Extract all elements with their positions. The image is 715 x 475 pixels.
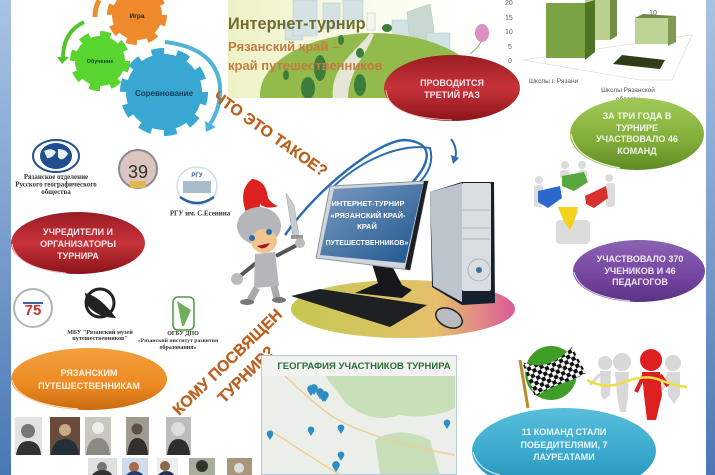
portraits of travellers <box>15 417 252 475</box>
logo: Russian Geographical Society: общества <box>41 189 71 196</box>
heading: what is it: ЧТО ЭТО ТАКОЕ? <box>210 88 330 180</box>
3D bar chart <box>505 0 692 103</box>
heading: who is it dedicated to: ТУРНИР? <box>215 343 278 407</box>
map pins <box>267 384 450 472</box>
arrow: orange arc <box>95 0 99 17</box>
monitor text <box>326 199 408 247</box>
icon: checkered flag <box>520 346 586 408</box>
oval: winners and laureates: ПОБЕДИТЕЛЯМИ, 7 <box>520 440 608 450</box>
trees <box>283 24 392 99</box>
oval: third time <box>384 55 520 121</box>
logo: Ryazan Institute of Education <box>138 297 218 351</box>
gear: Соревнование <box>126 54 202 130</box>
banner subtitle: Рязанский край – <box>228 39 339 54</box>
logo: Museum of travellers: путешественников" <box>72 336 128 342</box>
portrait 3 <box>85 417 111 455</box>
light bar back <box>585 0 617 40</box>
logo: Russian Geographical Society <box>15 140 97 196</box>
logo: Ryazan State University: РГУ им. С.Есенина <box>170 210 231 218</box>
chart floor <box>523 35 692 80</box>
light bar right: 10 <box>649 10 657 17</box>
category label: region schools: Школы Рязанской <box>601 86 655 94</box>
oval: 370 students: ПЕДАГОГОВ <box>612 277 668 287</box>
legs <box>250 286 277 300</box>
keyboard <box>291 289 427 327</box>
axis labels: 5 <box>508 44 512 51</box>
oval: founders and organizers <box>11 212 145 274</box>
axis labels: 15 <box>505 15 513 22</box>
axis labels: 10 <box>505 29 513 36</box>
oval: third time: ПРОВОДИТСЯ <box>420 78 484 88</box>
oval: third time: ТРЕТИЙ РАЗ <box>424 89 480 100</box>
red runner <box>636 349 668 420</box>
oval: 46 teams <box>570 98 704 170</box>
gear: Соревнование: Соревнование <box>135 89 194 98</box>
oval: founders and organizers: ТУРНИРА <box>57 251 99 261</box>
oval: winners and laureates: ЛАУРЕАТАМИ <box>533 452 595 462</box>
icon: runners at the finish line <box>587 349 687 420</box>
banner illustration: Internet tournament <box>228 0 489 98</box>
logo: Ryazan State University <box>170 167 231 218</box>
sword <box>286 193 299 237</box>
illustration: computer with tournament title <box>285 139 515 338</box>
buildings <box>285 0 450 54</box>
right side bar <box>706 0 715 475</box>
green hill <box>260 33 460 98</box>
logo: 75 years: 75 <box>25 302 41 319</box>
portrait 4 <box>126 417 149 455</box>
logo: Ryazan Institute of Education: образования» <box>160 344 196 351</box>
portrait 2 <box>50 417 80 455</box>
arrow: blue arc <box>165 42 220 132</box>
oval: founders and organizers: УЧРЕДИТЕЛИ И <box>43 227 113 237</box>
map: geography of participants <box>261 355 457 475</box>
portrait 7 <box>122 458 148 475</box>
gears diagram: game, learning, competition <box>57 0 220 132</box>
body <box>254 252 279 288</box>
portrait 9 <box>189 458 215 475</box>
blue swoop arrows <box>285 139 459 235</box>
oval: 370 students: УЧАСТВОВАЛО 370 <box>597 254 683 264</box>
logo: Russian Geographical Society: Русского географического <box>15 182 97 188</box>
monitor text: КРАЙ <box>357 222 377 231</box>
arrow: green arc <box>57 22 84 64</box>
logo: Ryazan Institute of Education: ОГБУ ДПО <box>167 331 199 337</box>
oval: winners and laureates: 11 КОМАНД СТАЛИ <box>522 427 606 437</box>
left side bar <box>0 0 11 475</box>
oval: 46 teams: КОМАНД <box>617 146 657 156</box>
monitor text: ИНТЕРНЕТ-ТУРНИР <box>332 199 404 208</box>
light bar right <box>635 10 676 46</box>
gear: Обучение: Обучение <box>87 58 113 65</box>
map header: ГЕОГРАФИЯ УЧАСТНИКОВ ТУРНИРА <box>277 361 451 372</box>
logo: Museum of travellers: МБУ "Рязанский музей <box>67 329 133 336</box>
oval: Ryazan travellers: РЯЗАНСКИМ <box>61 368 117 378</box>
finish tape <box>587 377 687 387</box>
icon: people with puzzle pieces <box>534 161 615 244</box>
dark bar <box>546 0 595 60</box>
axis labels <box>505 0 513 65</box>
forest areas <box>325 376 455 475</box>
mouse <box>433 304 465 332</box>
arms <box>276 244 299 256</box>
logo: badge 39 <box>119 150 157 188</box>
oval: Ryazan travellers: ПУТЕШЕСТВЕННИКАМ <box>38 381 140 391</box>
oval: Ryazan travellers <box>11 348 167 410</box>
banner subtitle <box>228 39 383 73</box>
oval: 370 students <box>573 240 705 302</box>
plume <box>243 179 278 214</box>
category label: region schools <box>601 86 655 103</box>
logo: Russian Geographical Society: Рязанское отделение <box>24 174 88 181</box>
helmet <box>237 207 281 245</box>
monitor text: «РЯЗАНСКИЙ КРАЙ- <box>330 211 406 220</box>
axis labels: 20 <box>505 0 513 7</box>
portrait 6 <box>88 458 117 475</box>
oval: winners and laureates <box>472 408 656 475</box>
monitor stand <box>355 264 412 298</box>
roads <box>270 376 455 475</box>
system unit <box>430 182 495 305</box>
monitor <box>316 181 428 270</box>
oval: 46 teams: УЧАСТВОВАЛО 46 <box>596 134 678 144</box>
category label: city schools: Школы г. Рязани <box>529 78 579 85</box>
portrait 10 <box>227 458 252 475</box>
portrait 1 <box>15 417 42 455</box>
logo: Ryazan Institute of Education: «Рязанский институт развития <box>138 337 218 344</box>
balloon <box>470 24 489 54</box>
gear: Игра <box>112 0 162 40</box>
map header <box>278 362 450 376</box>
heading: who is it dedicated to: КОМУ ПОСВЯЩЕН <box>170 306 286 419</box>
flat dark bar <box>613 55 665 69</box>
logo: Ryazan State University: РГУ <box>191 173 203 179</box>
floor ellipse <box>291 280 515 338</box>
category label: region schools: области <box>616 95 641 103</box>
map frame <box>262 356 456 474</box>
banner subtitle: край путешественников <box>228 58 383 73</box>
portrait 8 <box>157 458 178 475</box>
monitor text: ПУТЕШЕСТВЕННИКОВ» <box>326 240 408 247</box>
oval: 370 students: УЧЕНИКОВ И 46 <box>604 266 676 276</box>
oval: 46 teams: ТУРНИРЕ <box>616 123 658 133</box>
logo: 75 years <box>14 289 52 327</box>
logo: badge 39: 39 <box>128 162 148 182</box>
axis labels: 0 <box>508 58 512 65</box>
illustration: knight with sword <box>231 179 305 305</box>
gear: Игра: Игра <box>130 13 145 20</box>
banner title: Интернет-турнир <box>228 15 366 33</box>
oval: founders and organizers: ОРГАНИЗАТОРЫ <box>40 239 116 249</box>
face <box>251 229 277 253</box>
oval: 46 teams: ЗА ТРИ ГОДА В <box>603 111 672 121</box>
portrait 5 <box>166 417 191 455</box>
logo: Museum of travellers <box>67 289 133 342</box>
road <box>333 33 374 98</box>
gear: Обучение <box>75 36 125 86</box>
grey runners <box>590 353 681 412</box>
